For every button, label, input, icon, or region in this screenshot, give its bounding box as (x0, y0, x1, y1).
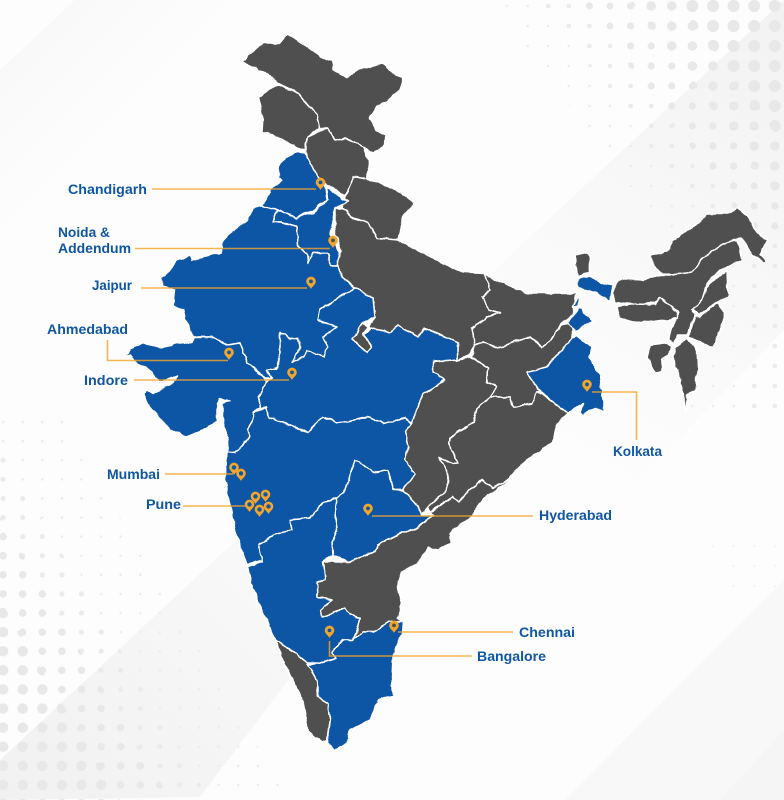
pin: Pune 5 (264, 502, 273, 514)
label: Chandigarh: Chandigarh (68, 182, 147, 197)
line: Indore (134, 379, 289, 381)
label: Indore: Indore (84, 373, 129, 388)
region: Assam (613, 240, 742, 343)
region: Karnataka (247, 498, 360, 663)
region: Kashmir west (258, 85, 320, 150)
region: Punjab (262, 152, 327, 218)
leader lines (108, 189, 636, 656)
region: Manipur (688, 303, 725, 348)
region: Meghalaya (617, 297, 677, 322)
pin: Ahmedabad (224, 348, 234, 360)
pin: Indore (287, 368, 297, 380)
region: Gujarat (125, 337, 267, 453)
pin: Jaipur (306, 277, 316, 289)
region: Bihar (472, 273, 577, 348)
pin: Chandigarh (316, 178, 325, 190)
line: Kolkata (592, 392, 636, 440)
line: Noida and Addendum (135, 248, 330, 250)
region: Odisha (428, 392, 568, 512)
region: West Bengal south (527, 335, 605, 415)
region: Mizoram (673, 338, 698, 414)
pin: Pune 3 (245, 500, 254, 512)
region: Arunachal Pradesh (649, 208, 768, 275)
pin: Kolkata (582, 380, 592, 392)
region: Maharashtra (225, 408, 415, 565)
label: Ahmedabad: Ahmedabad (47, 322, 128, 337)
region: West Bengal middle (568, 293, 595, 332)
map of India (125, 34, 768, 750)
label: Chennai: Chennai (519, 625, 575, 640)
region: Tamil Nadu (307, 622, 403, 750)
region: Sikkim (574, 252, 590, 276)
pin: Noida (328, 236, 338, 248)
location pins (224, 178, 592, 638)
region: Kerala (275, 640, 330, 742)
region: Ladakh and Kashmir north (243, 34, 404, 153)
label: Kolkata: Kolkata (613, 444, 662, 459)
region: Uttar Pradesh (335, 208, 500, 360)
line: Pune (183, 505, 245, 507)
region: Nagaland (692, 270, 728, 315)
label: Mumbai: Mumbai (107, 467, 160, 482)
region: Jharkhand (472, 323, 572, 407)
pin: Mumbai 1 (229, 463, 239, 475)
region: Himachal Pradesh (305, 128, 369, 197)
label: Noida and Addendum: Noida & (58, 225, 110, 240)
region: Madhya Pradesh (258, 288, 458, 432)
region: Haryana and Delhi (273, 187, 348, 265)
city labels (47, 182, 662, 664)
pin: Pune 1 (251, 492, 260, 504)
region: Goa (247, 565, 258, 583)
pin: Bangalore (325, 626, 334, 638)
label: Hyderabad: Hyderabad (539, 508, 612, 523)
line: Bangalore (330, 641, 472, 656)
line: Mumbai (165, 473, 233, 475)
region: Telangana (332, 460, 433, 562)
pin: Chennai (389, 621, 399, 633)
label: Bangalore: Bangalore (477, 649, 546, 664)
line: Ahmedabad (108, 340, 228, 360)
region: West Bengal north (578, 275, 613, 302)
pin: Pune 4 (255, 505, 264, 517)
label: Jaipur: Jaipur (92, 278, 133, 293)
region: Uttarakhand (343, 177, 415, 240)
label: Noida and Addendum: Addendum (58, 241, 131, 256)
pin: Mumbai 2 (236, 469, 246, 481)
region: Chhattisgarh (403, 357, 497, 515)
region: Tripura (647, 343, 672, 373)
pin: Hyderabad (363, 504, 373, 516)
line: Chennai (398, 631, 513, 633)
label: Pune: Pune (146, 497, 182, 512)
line: Hyderabad (372, 515, 533, 517)
region: Rajasthan (162, 206, 355, 378)
line: Chandigarh (152, 188, 316, 190)
region: Andhra Pradesh (317, 477, 513, 640)
pin: Pune 2 (261, 490, 270, 502)
line: Jaipur (141, 287, 307, 289)
